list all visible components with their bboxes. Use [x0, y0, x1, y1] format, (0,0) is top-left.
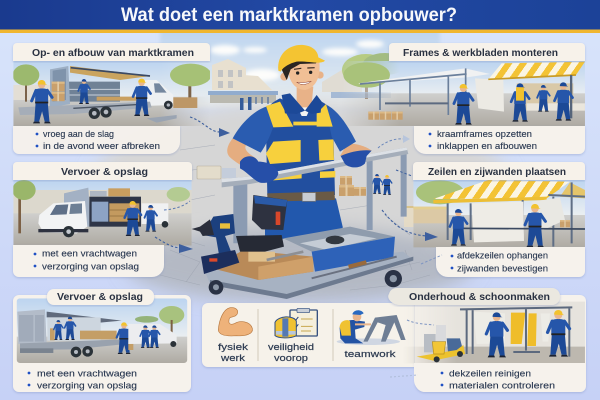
- plaza foreground: [125, 227, 475, 303]
- sleeves: [233, 106, 273, 153]
- plaza ground: [90, 100, 510, 280]
- panel heading: Vervoer & opslag: [57, 291, 143, 303]
- arrow: strip to maintenance: [407, 320, 434, 325]
- bullet list: [13, 126, 180, 154]
- bullet list: [414, 126, 585, 154]
- panel 5 illustration: [403, 179, 587, 248]
- buildings right: [322, 62, 362, 92]
- arrow: lower middle to sails panel: [382, 210, 438, 241]
- tool case: [236, 235, 284, 252]
- panel heading: Frames & werkbladen monteren: [403, 47, 558, 59]
- title bar: [0, 0, 600, 33]
- bullet list: afdekzeilen ophangen: [457, 250, 548, 262]
- icon: teamwork: [337, 310, 406, 345]
- trousers: [265, 198, 343, 240]
- bullet list: in de avond weer afbreken: [43, 141, 160, 152]
- panel background: [13, 295, 191, 392]
- bullet list: met een vrachtwagen: [37, 368, 137, 380]
- wood crate: [212, 250, 313, 280]
- bullet list: [13, 245, 164, 277]
- title band: [389, 43, 585, 61]
- neck: [297, 87, 313, 110]
- panel: Vervoer & opslag (top): [12, 162, 192, 277]
- arrow: faint bottom link: [390, 375, 418, 377]
- label: veiligheid: [268, 342, 314, 353]
- panel 4 illustration: [340, 61, 585, 126]
- tool pouch: [252, 195, 287, 230]
- tree right background: [342, 53, 407, 99]
- bullet list: verzorging van opslag: [42, 262, 139, 272]
- head: [280, 73, 288, 81]
- arrow: to frames panel: [378, 135, 410, 148]
- panel 1 backdrop: [13, 61, 210, 126]
- arrow: top-left panel to worker: [190, 117, 230, 137]
- panel 1 illustration: [13, 61, 211, 126]
- label: werk: [220, 353, 245, 364]
- bullet list: [414, 363, 585, 392]
- forearm skin: [340, 144, 372, 156]
- label: teamwork: [344, 349, 396, 360]
- safety vest: [266, 102, 335, 181]
- bullet list: met een vrachtwagen: [42, 248, 137, 260]
- panel: Vervoer & opslag (bottom): [13, 289, 191, 392]
- boxes and workers behind the cart: [197, 166, 221, 179]
- arrow: middle-left panel to drill: [155, 237, 193, 253]
- title band: [13, 43, 210, 61]
- panel 4 backdrop: [340, 61, 585, 126]
- panel 3 illustration: [17, 298, 187, 363]
- gloves: [240, 156, 278, 183]
- people far: [240, 97, 269, 110]
- bullet list: dekzeilen reinigen: [449, 368, 531, 380]
- market square scene: [90, 28, 510, 303]
- icon: muscle: [218, 308, 252, 336]
- icon: vest and checklist: [275, 308, 317, 338]
- panel: Op- en afbouw van marktkramen: [13, 43, 211, 154]
- cart platform: [205, 252, 413, 298]
- title band: [413, 162, 585, 180]
- blue bin: [283, 227, 395, 252]
- collar: [282, 93, 322, 114]
- bullet list: kraamframes opzetten: [437, 129, 532, 140]
- title pill: [47, 289, 154, 305]
- icon: worker with cart: [192, 45, 413, 299]
- label: fysiek: [218, 342, 248, 353]
- panel heading: Op- en afbouw van marktkramen: [32, 47, 194, 59]
- arrow: sails bullets link: [421, 255, 442, 264]
- rail: [222, 147, 408, 187]
- bullet list: zijwanden bevestigen: [457, 264, 548, 274]
- bullet list: [436, 247, 585, 277]
- panel: Eigenschappen: [202, 303, 425, 367]
- label: voorop: [274, 353, 308, 364]
- sky: [160, 28, 440, 108]
- hard hat: [278, 45, 325, 72]
- panel 6 backdrop: [403, 302, 585, 363]
- belt: [267, 191, 335, 202]
- bullet list: inklappen en afbouwen: [437, 141, 537, 152]
- panel: Onderhoud & schoonmaken: [388, 288, 586, 392]
- drill: [203, 214, 235, 257]
- torso: [266, 98, 335, 195]
- panel heading: Vervoer & opslag: [61, 166, 148, 178]
- main title: Wat doet een marktkramen opbouwer?: [121, 5, 457, 26]
- panel 6 illustration: [403, 302, 585, 363]
- divider: [258, 309, 333, 361]
- panel heading: Zeilen en zijwanden plaatsen: [428, 166, 566, 178]
- panel: Zeilen en zijwanden plaatsen: [403, 162, 587, 277]
- paving: [160, 145, 430, 290]
- panel: Frames & werkbladen monteren: [340, 43, 585, 154]
- buildings left: [212, 59, 272, 90]
- bullet list: verzorging van opslag: [37, 380, 137, 392]
- arrow: drill link: [164, 201, 190, 210]
- bullet list: vroeg aan de slag: [43, 129, 114, 140]
- title band: [13, 162, 192, 180]
- panel background: [415, 295, 586, 392]
- rail posts: [233, 153, 407, 243]
- title pill: [388, 288, 560, 305]
- arrow: to sails panel: [396, 170, 412, 176]
- bullet list: [28, 368, 137, 392]
- bullet list: materialen controleren: [449, 380, 555, 392]
- clouds: [210, 40, 384, 81]
- panel heading: Onderhoud & schoonmaken: [409, 291, 550, 303]
- panel 2 illustration: [12, 180, 192, 246]
- upper arm skin: [227, 138, 256, 169]
- gold rule: [0, 30, 600, 33]
- strip background: [202, 303, 425, 367]
- stalls left distance: [208, 91, 278, 95]
